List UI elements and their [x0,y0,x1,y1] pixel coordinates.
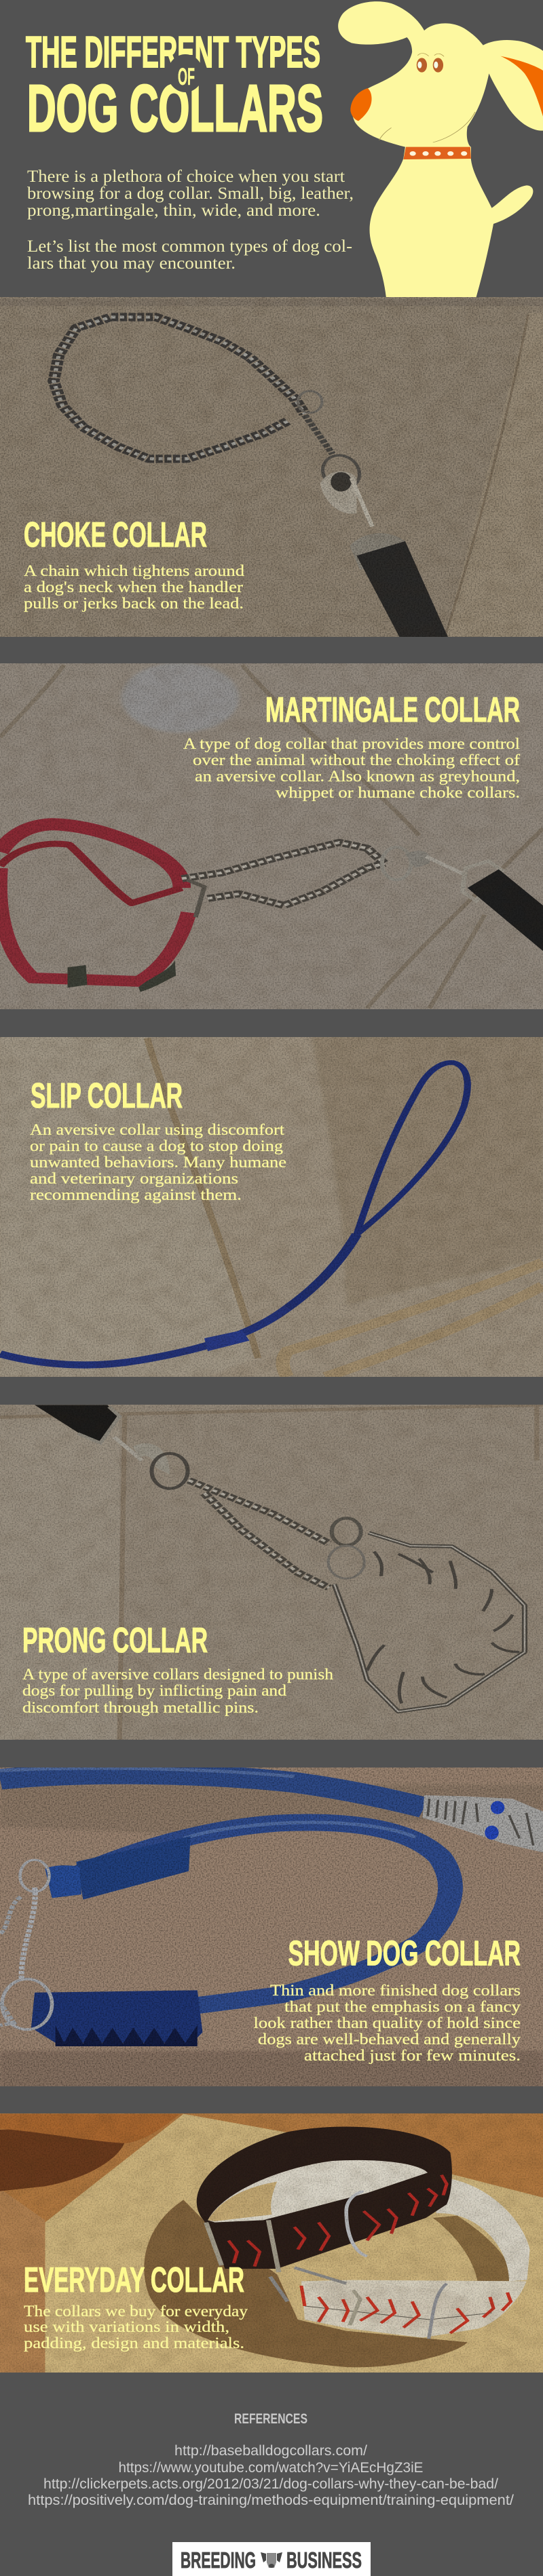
icon: dog head [261,2552,282,2568]
heading: choke collar: CHOKE COLLAR [24,515,207,555]
intro text: Let’s list the most common types of dog col- [27,237,352,256]
description: slip collar: An aversive collar using discomfort [30,1121,285,1138]
description: martingale collar [183,735,520,801]
logo: Breeding Business: BREEDING [181,2548,256,2573]
description: show dog collar [254,1982,521,2064]
description: slip collar: and veterinary organizations [30,1170,238,1187]
photo: blue slip lead on tile [0,1036,543,1377]
description: show dog collar: dogs are well-behaved and generally [258,2031,521,2048]
intro text: browsing for a dog collar. Small, big, leather, [27,184,354,203]
description: everyday collar: use with variations in width, [24,2318,229,2335]
description: choke collar: pulls or jerks back on the lead. [24,595,244,612]
logo: Breeding Business: BUSINESS [286,2548,362,2573]
description: choke collar: A chain which tightens around [24,562,245,579]
panel: show dog collar [0,1768,543,2088]
description: slip collar: or pain to cause a dog to stop doing [30,1137,284,1154]
photo: baseball stitched collars on infield [0,2113,543,2374]
description: choke collar [24,562,245,612]
intro text: prong,martingale, thin, wide, and more. [27,201,320,220]
description: prong collar [22,1666,334,1716]
intro text: There is a plethora of choice when you start [27,168,345,186]
heading: slip collar: SLIP COLLAR [31,1076,183,1116]
panel: everyday collar [0,2113,543,2374]
reference links: https://positively.com/dog-training/methods-equipment/training-equipment/ [28,2493,514,2508]
photo: prong collar on tile [0,1405,543,1741]
photo: choke chain on concrete [0,297,543,638]
reference links [28,2443,514,2508]
heading: prong collar: PRONG COLLAR [22,1621,208,1660]
panel: slip collar [0,1036,543,1377]
description: show dog collar: that put the emphasis on a fancy [284,1998,521,2015]
description: everyday collar: padding, design and materials. [24,2335,244,2351]
description: everyday collar [24,2303,248,2351]
panel: martingale collar [0,663,543,1009]
panel: prong collar [0,1405,543,1741]
description: prong collar: discomfort through metallic pins. [22,1699,259,1716]
reference links: http://clickerpets.acts.org/2012/03/21/dog-collars-why-they-can-be-bad/ [43,2476,498,2492]
reference links: https://www.youtube.com/watch?v=YiAEcHgZ3iE [118,2460,424,2476]
photo: blue show collar [0,1768,543,2088]
description: martingale collar: over the animal without the choking effect of [193,752,520,768]
description: martingale collar: A type of dog collar that provides more control [183,735,520,752]
description: show dog collar: look rather than quality of hold since [254,2014,521,2031]
title: DOG COLLARS [27,71,323,145]
heading: references: REFERENCES [234,2411,307,2427]
description: slip collar [30,1121,286,1203]
title [26,27,323,145]
title: THE DIFFERENT TYPES [26,27,320,77]
description: prong collar: dogs for pulling by inflicting pain and [22,1682,287,1699]
intro text: lars that you may encounter. [27,254,236,273]
photo: martingale collar on tile [0,663,543,1009]
description: show dog collar: attached just for few minutes. [304,2047,521,2064]
illustration: yellow dog with orange collar [338,1,543,297]
reference links: http://baseballdogcollars.com/ [174,2443,367,2459]
panel: references [28,2411,514,2508]
description: martingale collar: whippet or humane choke collars. [276,784,520,801]
logo: Breeding Business [172,2542,371,2576]
description: slip collar: recommending against them. [30,1186,242,1203]
description: martingale collar: an aversive collar. Also known as greyhound, [195,768,520,785]
heading: everyday collar: EVERYDAY COLLAR [24,2261,244,2300]
description: everyday collar: The collars we buy for everyday [24,2303,248,2320]
panel: choke collar [0,297,543,638]
intro text [27,168,354,273]
title: OF [178,64,195,90]
description: show dog collar: Thin and more finished dog collars [270,1982,521,1999]
description: slip collar: unwanted behaviors. Many humane [30,1154,286,1171]
panel: header [26,1,543,297]
description: choke collar: a dog's neck when the handler [24,579,243,596]
description: prong collar: A type of aversive collars designed to punish [22,1666,334,1683]
